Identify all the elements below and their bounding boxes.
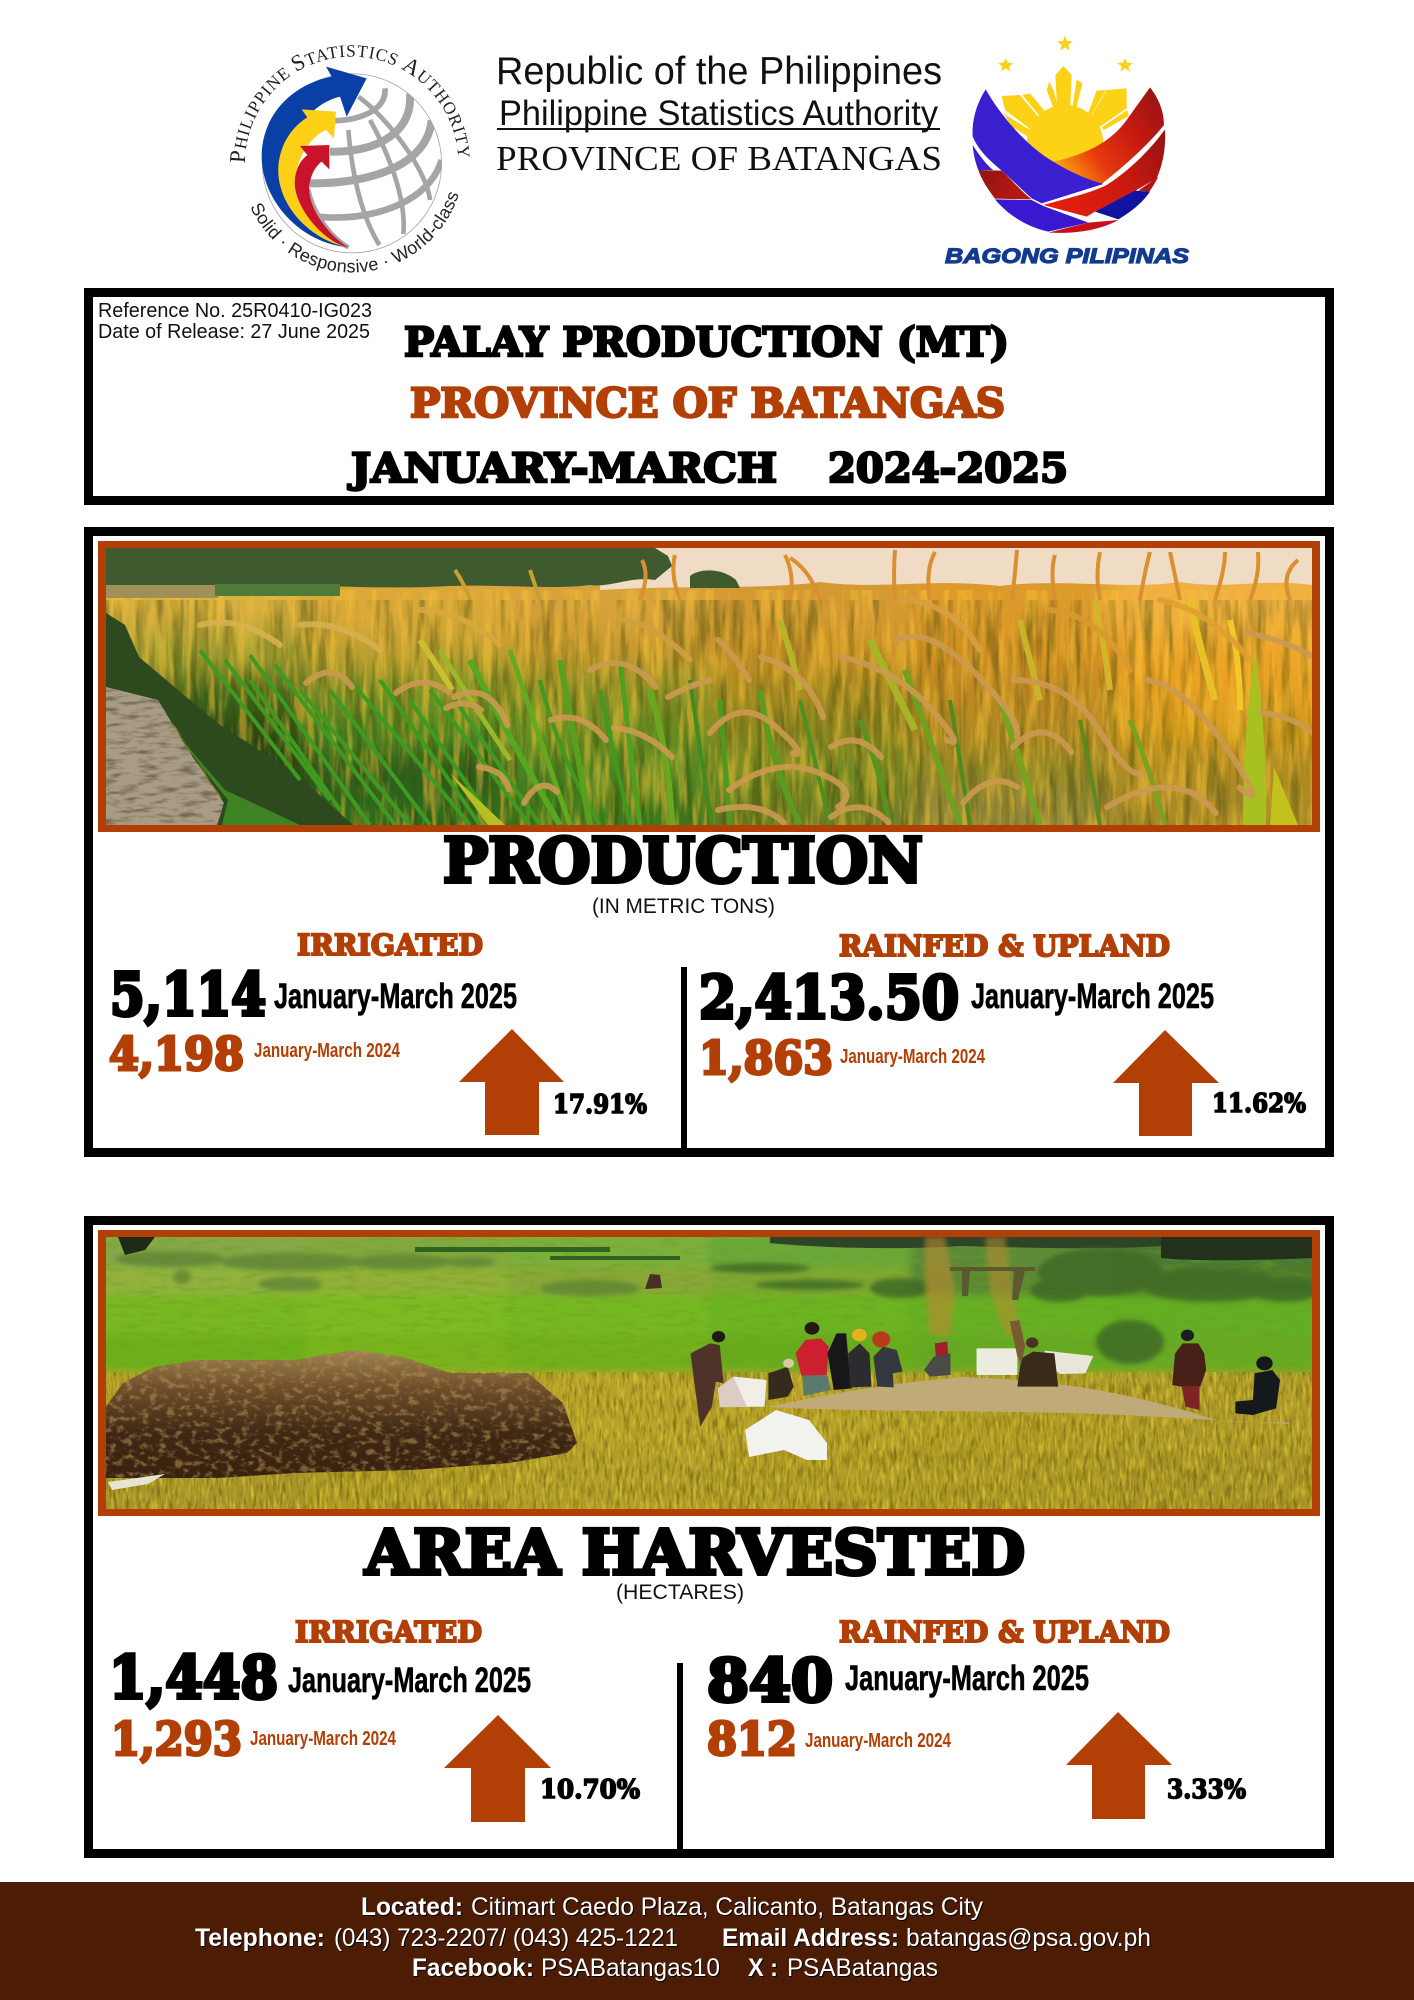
up arrow (444, 1715, 551, 1822)
up arrow (1066, 1712, 1172, 1819)
left dark red band (978, 170, 1032, 199)
logo: Philippine Statistics Authority seal (230, 45, 470, 273)
social media: PSABatangas (787, 1954, 938, 1982)
right small red sliver (1138, 177, 1158, 192)
column heading: RAINFED & UPLAND (839, 1615, 1170, 1649)
up arrow (1113, 1030, 1219, 1136)
panel: production (50, 500, 1371, 1157)
republic line: Republic of the Philippines (496, 50, 942, 93)
social media (412, 1954, 938, 1982)
thresher shed (950, 1267, 1035, 1300)
label 2025: January-March 2025 (288, 1661, 531, 1700)
stars (998, 36, 1133, 71)
telephone and email: Telephone: (195, 1924, 325, 1952)
straw path (106, 687, 224, 825)
reference number: Reference No. 25R0410-IG023 (98, 300, 372, 322)
divider (677, 1663, 683, 1858)
title line 3 years: 2024-2025 (828, 445, 1068, 492)
unit label: (HECTARES) (616, 1581, 744, 1604)
maroon shirt worker (1172, 1343, 1206, 1387)
green blades (200, 600, 1240, 825)
yellow arrow (278, 109, 348, 247)
title line 2: PROVINCE OF BATANGAS (410, 380, 1005, 427)
value 2025: 1,448 (109, 1643, 278, 1712)
province line: PROVINCE OF BATANGAS (496, 139, 942, 178)
dark tree line and bushes (115, 1237, 1320, 1364)
red arrow (295, 145, 348, 247)
divider (681, 967, 687, 1157)
social media: X : (748, 1954, 778, 1982)
up arrow (459, 1029, 564, 1135)
grain pile (768, 1377, 1290, 1424)
rice panicles (200, 600, 1313, 823)
percent change: 11.62% (1212, 1089, 1306, 1119)
sun and rays (1002, 66, 1129, 182)
dark bank (106, 613, 353, 825)
red upper band (1053, 87, 1164, 184)
telephone and email: (043) 723-2207/ (043) 425-1221 (334, 1924, 678, 1952)
title line 1: PALAY PRODUCTION (MT) (404, 319, 1009, 366)
photo frame: harvest scene (98, 1230, 1320, 1516)
seal ring text: PHILIPPINE STATISTICS AUTHORITY (230, 45, 470, 163)
unit label: (IN METRIC TONS) (592, 895, 775, 918)
photo frame: rice field (98, 541, 1320, 832)
kneeling worker (768, 1367, 794, 1400)
lower blue (995, 199, 1088, 232)
workers and equipment (691, 1320, 1280, 1427)
label 2024: January-March 2024 (250, 1728, 397, 1750)
release date: Date of Release: 27 June 2025 (98, 321, 370, 343)
grain being poured (925, 1237, 955, 1335)
distant hedge (106, 585, 218, 598)
telephone and email: Email Address: (722, 1924, 899, 1952)
social media: Facebook: (412, 1954, 534, 1982)
tree line (106, 548, 672, 588)
right dark blue (1095, 191, 1150, 219)
blue arrow (262, 67, 367, 247)
sky (600, 548, 1312, 590)
logo: Bagong Pilipinas (945, 36, 1189, 268)
label 2024: January-March 2024 (805, 1730, 952, 1752)
column: rainfed and upland (699, 929, 1306, 1136)
section heading: AREA HARVESTED (364, 1516, 1025, 1589)
white sack (745, 1410, 827, 1460)
value 2024: 1,293 (111, 1712, 242, 1766)
value 2024: 812 (707, 1712, 797, 1766)
telephone and email (195, 1924, 1151, 1952)
percent change: 3.33% (1167, 1775, 1246, 1805)
sacks (718, 1377, 766, 1407)
label 2025: January-March 2025 (274, 977, 517, 1016)
grain tips over sky (455, 550, 1298, 600)
social media: PSABatangas10 (541, 1954, 720, 1982)
telephone and email: batangas@psa.gov.ph (906, 1924, 1151, 1952)
seated worker (1235, 1370, 1280, 1415)
hay stack (106, 1350, 577, 1490)
value 2025: 840 (707, 1646, 833, 1715)
header text: agency name (496, 50, 942, 178)
title line 3 period: JANUARY-MARCH (348, 445, 777, 492)
left worker (691, 1343, 724, 1427)
left blue wedge (973, 145, 993, 170)
globe (262, 74, 442, 253)
section heading: PRODUCTION (443, 824, 923, 897)
address: Located: (361, 1893, 463, 1921)
percent change: 17.91% (553, 1090, 647, 1120)
panel: title box (88, 292, 1330, 500)
thresher operator (1017, 1352, 1058, 1387)
streak texture (106, 600, 1312, 825)
wordmark: BAGONG PILIPINAS (945, 245, 1189, 268)
label 2024: January-March 2024 (254, 1040, 401, 1062)
value 2025: 5,114 (110, 960, 266, 1029)
dark group (828, 1333, 852, 1390)
label 2024: January-March 2024 (840, 1046, 986, 1068)
agency line: Philippine Statistics Authority (499, 94, 938, 133)
white cow (1045, 1351, 1093, 1374)
crossing red band (1043, 129, 1165, 217)
panel: area harvested (84, 1216, 1334, 1858)
blue upper band (973, 89, 1103, 203)
column: irrigated (109, 1615, 640, 1822)
seal motto: Solid · Responsive · World-class (252, 192, 458, 273)
label 2025: January-March 2025 (971, 977, 1214, 1016)
winnowing worker (924, 1353, 950, 1377)
column heading: IRRIGATED (295, 1615, 482, 1649)
footer: contact details (0, 1882, 1414, 2000)
percent change: 10.70% (540, 1775, 640, 1805)
value 2025: 2,413.50 (699, 963, 959, 1032)
address: Citimart Caedo Plaza, Calicanto, Batangas City (471, 1893, 983, 1921)
column: rainfed and upland (707, 1615, 1246, 1819)
column heading: IRRIGATED (297, 928, 483, 962)
grass and grain texture (106, 1237, 1312, 1372)
column heading: RAINFED & UPLAND (839, 929, 1170, 963)
red shirt worker (796, 1338, 829, 1376)
bottom red strip (1048, 220, 1118, 233)
column: irrigated (109, 928, 647, 1135)
value 2024: 1,863 (699, 1031, 833, 1085)
label 2025: January-March 2025 (845, 1659, 1089, 1698)
white box (977, 1348, 1017, 1375)
value 2024: 4,198 (109, 1027, 244, 1081)
large leaf blades (450, 773, 505, 825)
